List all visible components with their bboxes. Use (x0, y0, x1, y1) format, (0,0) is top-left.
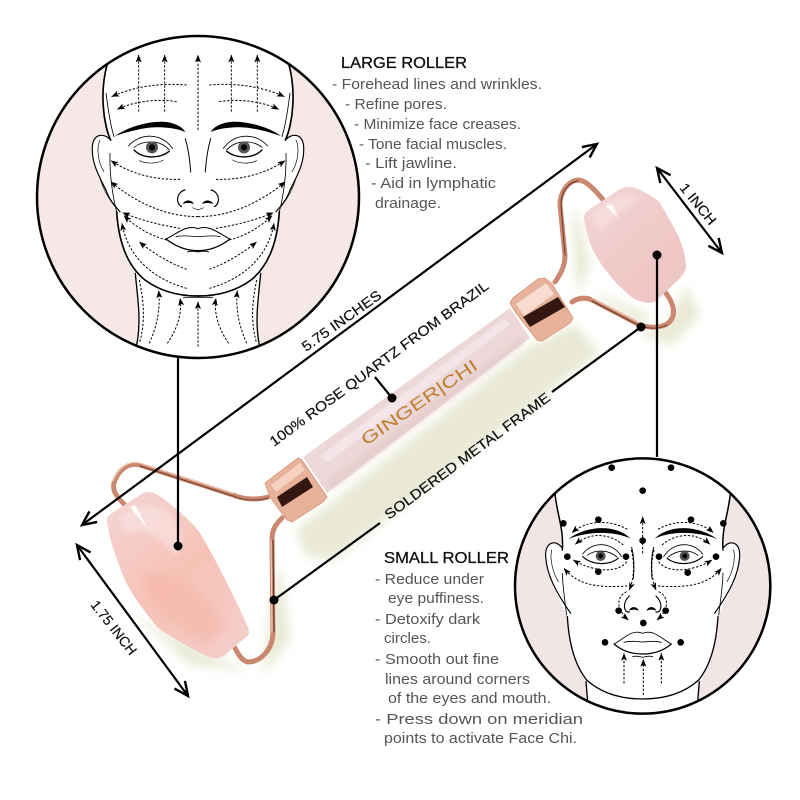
dimension arrow: 1.75 inch (77, 545, 188, 696)
callout: soldered metal frame (270, 322, 646, 604)
metal collar, large end (265, 458, 327, 522)
text block: small roller benefits: - Reduce under (375, 571, 484, 588)
text block: large roller benefits: - Aid in lymphatic (371, 175, 497, 192)
callout: 100% rose quartz from Brazil (266, 277, 492, 449)
label: 1.75 inch: 1.75 INCH (88, 597, 140, 658)
text block: small roller benefits: of the eyes and mouth. (388, 690, 551, 707)
small face illustration with meridian points (546, 450, 740, 717)
pink backdrop circle (37, 36, 359, 358)
text block: large roller benefits: - Forehead lines and wrinkles. (332, 76, 542, 93)
product: rose quartz roller (107, 180, 700, 676)
leader line: small roller (652, 250, 662, 457)
metal frame, large end (113, 462, 282, 662)
metal frame, small end (555, 180, 674, 328)
small circle outline (515, 458, 770, 714)
label: rose quartz: 100% ROSE QUARTZ FROM BRAZIL (266, 277, 492, 449)
text block: large roller benefits (332, 55, 542, 212)
small rose quartz roller head (584, 187, 686, 303)
panel: large roller face chart (37, 30, 359, 360)
text block: small roller benefits: - Detoxify dark (375, 611, 481, 628)
text block: large roller benefits: - Refine pores. (345, 96, 447, 113)
text block: small roller benefits: - Press down on meridian (375, 711, 583, 728)
text block: small roller benefits: - Smooth out fine (375, 651, 499, 668)
large face illustration with massage arrows (92, 30, 304, 360)
text block: small roller benefits: lines around corners (385, 671, 530, 688)
text block: small roller benefits (375, 550, 583, 747)
panel: small roller face chart (515, 450, 770, 717)
text block: small roller benefits: points to activate Face Chi. (384, 730, 577, 747)
quartz handle (303, 308, 530, 493)
dimension arrow: 1 inch (657, 168, 722, 253)
label: soldered metal frame: SOLDERED METAL FRAME (381, 389, 553, 522)
brand name on handle: GINGER|CHI (358, 356, 481, 449)
label: 1 inch: 1 INCH (677, 180, 720, 228)
text block: small roller benefits: eye puffiness. (388, 590, 484, 607)
text block: large roller benefits: drainage. (375, 195, 441, 212)
roller cast shadow (130, 205, 700, 676)
text block: large roller benefits: - Minimize face creases. (354, 116, 521, 133)
heading: small roller: SMALL ROLLER (384, 550, 509, 567)
large circle outline (37, 36, 359, 358)
label: 5.75 inches: 5.75 INCHES (298, 287, 384, 354)
meridian points (560, 464, 727, 646)
text block: large roller benefits: - Lift jawline. (365, 155, 457, 172)
leader line: large roller (174, 357, 182, 550)
pink backdrop circle (515, 458, 770, 714)
heading: large roller: LARGE ROLLER (341, 55, 467, 72)
metal collar, small end (510, 278, 573, 341)
text block: large roller benefits: - Tone facial muscles. (359, 136, 507, 153)
text block: small roller benefits: circles. (384, 630, 431, 647)
large rose quartz roller head (107, 492, 249, 658)
